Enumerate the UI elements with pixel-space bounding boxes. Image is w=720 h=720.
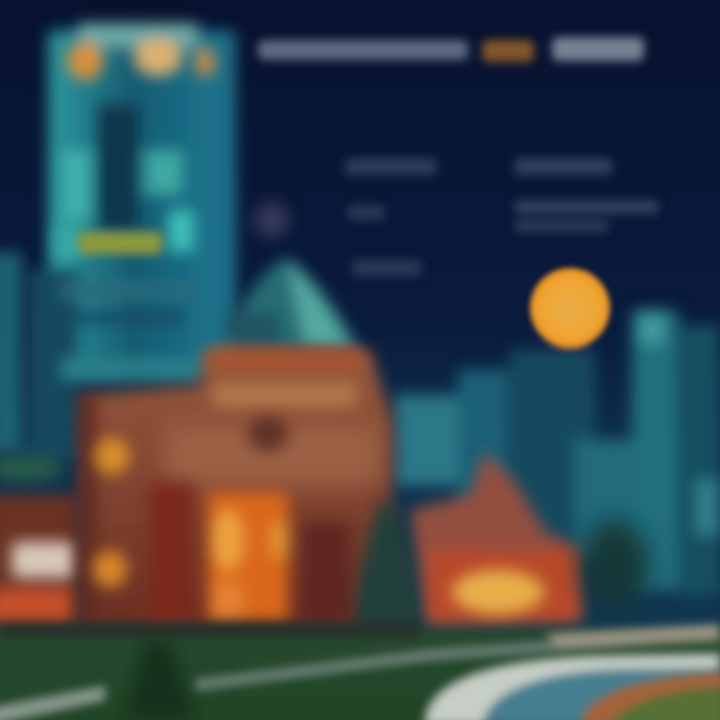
moon bbox=[530, 268, 610, 348]
path: light walkways bbox=[0, 624, 720, 720]
glowing window bbox=[452, 570, 544, 614]
ground: lawn bbox=[0, 630, 720, 720]
tower top lights bbox=[67, 24, 215, 80]
lawn: bottom right island bbox=[580, 672, 720, 720]
roof band bbox=[208, 348, 363, 370]
building: far left tower bbox=[0, 252, 22, 452]
pool: curved water with white rim bbox=[425, 654, 720, 720]
tower lit band bbox=[78, 232, 162, 254]
lit window upper bbox=[95, 438, 129, 474]
dark columns bbox=[80, 395, 350, 625]
ground: dark strip bbox=[0, 622, 420, 638]
text block: right column bbox=[514, 158, 659, 232]
tree: dark conifer bbox=[355, 495, 420, 630]
building: tall teal tower bbox=[28, 24, 236, 460]
tree: foreground dark trunk bbox=[125, 640, 195, 720]
small dark ornament above dome bbox=[254, 202, 290, 238]
tower lower section bbox=[60, 282, 200, 380]
lit window lower bbox=[93, 551, 127, 587]
trees: right dark foliage bbox=[581, 520, 649, 610]
building: main brick hall bbox=[80, 348, 392, 630]
tower windows bbox=[55, 105, 194, 260]
building: small left red house bbox=[0, 495, 78, 625]
building: right orange house bbox=[410, 452, 582, 625]
bushes: left bbox=[0, 454, 63, 482]
text block: left column bbox=[345, 158, 437, 276]
glowing entrance bbox=[208, 492, 289, 620]
title: blurred heading bars bbox=[258, 37, 644, 62]
lit white window bbox=[12, 542, 74, 578]
dark arch detail bbox=[248, 416, 288, 452]
building: teal dome bbox=[218, 258, 360, 352]
skyline: right teal towers bbox=[395, 310, 720, 595]
